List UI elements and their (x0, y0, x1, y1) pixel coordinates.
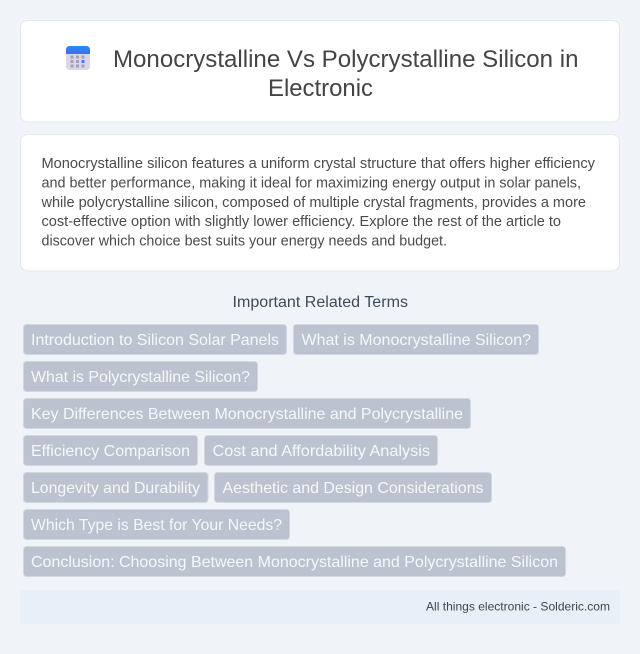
panel: introduction (20, 134, 620, 271)
tag: introduction (24, 324, 286, 354)
icon: calendar (66, 46, 90, 70)
tag: conclusion (24, 546, 566, 576)
tag: monocrystalline (294, 324, 538, 354)
tag: longevity: Longevity and Durability (31, 480, 200, 497)
title: Monocrystalline Vs Polycrystalline Silicon in (113, 46, 578, 73)
tag: longevity (24, 472, 208, 502)
tag: aesthetic (214, 472, 492, 502)
title: Electronic (268, 75, 373, 102)
tag: efficiency (24, 436, 198, 466)
intro paragraph: cost-effective option with slightly lower efficiency. Explore the rest of the article to (42, 214, 561, 230)
footer credit: All things electronic - Solderic.com (426, 600, 610, 614)
footer (20, 590, 620, 624)
tag: monocrystalline: What is Monocrystalline Silicon? (302, 332, 531, 349)
heading: important related terms: Important Related Terms (232, 294, 408, 311)
tag: key differences (24, 398, 470, 428)
panel: header (20, 20, 620, 122)
tag: key differences: Key Differences Between Monocrystalline and Polycrystalline (31, 406, 463, 423)
tag: aesthetic: Aesthetic and Design Considerations (222, 480, 484, 497)
tag: which type: Which Type is Best for Your Needs? (31, 517, 282, 534)
intro paragraph (40, 156, 596, 250)
intro paragraph: while polycrystalline silicon, composed of multiple crystal fragments, provides a more (40, 195, 586, 211)
tag: polycrystalline: What is Polycrystalline Silicon? (31, 369, 250, 386)
tag: conclusion: Conclusion: Choosing Between Monocrystalline and Polycrystalline Silicon (31, 554, 558, 571)
tag: efficiency: Efficiency Comparison (31, 443, 190, 460)
tag: cost: Cost and Affordability Analysis (212, 443, 430, 460)
intro paragraph: discover which choice best suits your energy needs and budget. (42, 234, 447, 250)
tag: introduction: Introduction to Silicon Solar Panels (31, 332, 279, 349)
tag: polycrystalline (24, 362, 258, 392)
title (113, 46, 578, 102)
tag: cost (204, 436, 438, 466)
intro paragraph: Monocrystalline silicon features a uniform crystal structure that offers higher efficiency (42, 156, 596, 172)
tag: which type (24, 510, 290, 540)
intro paragraph: and better performance, making it ideal for maximizing energy output in solar panels, (42, 176, 581, 192)
panel: related terms tags (24, 324, 566, 576)
